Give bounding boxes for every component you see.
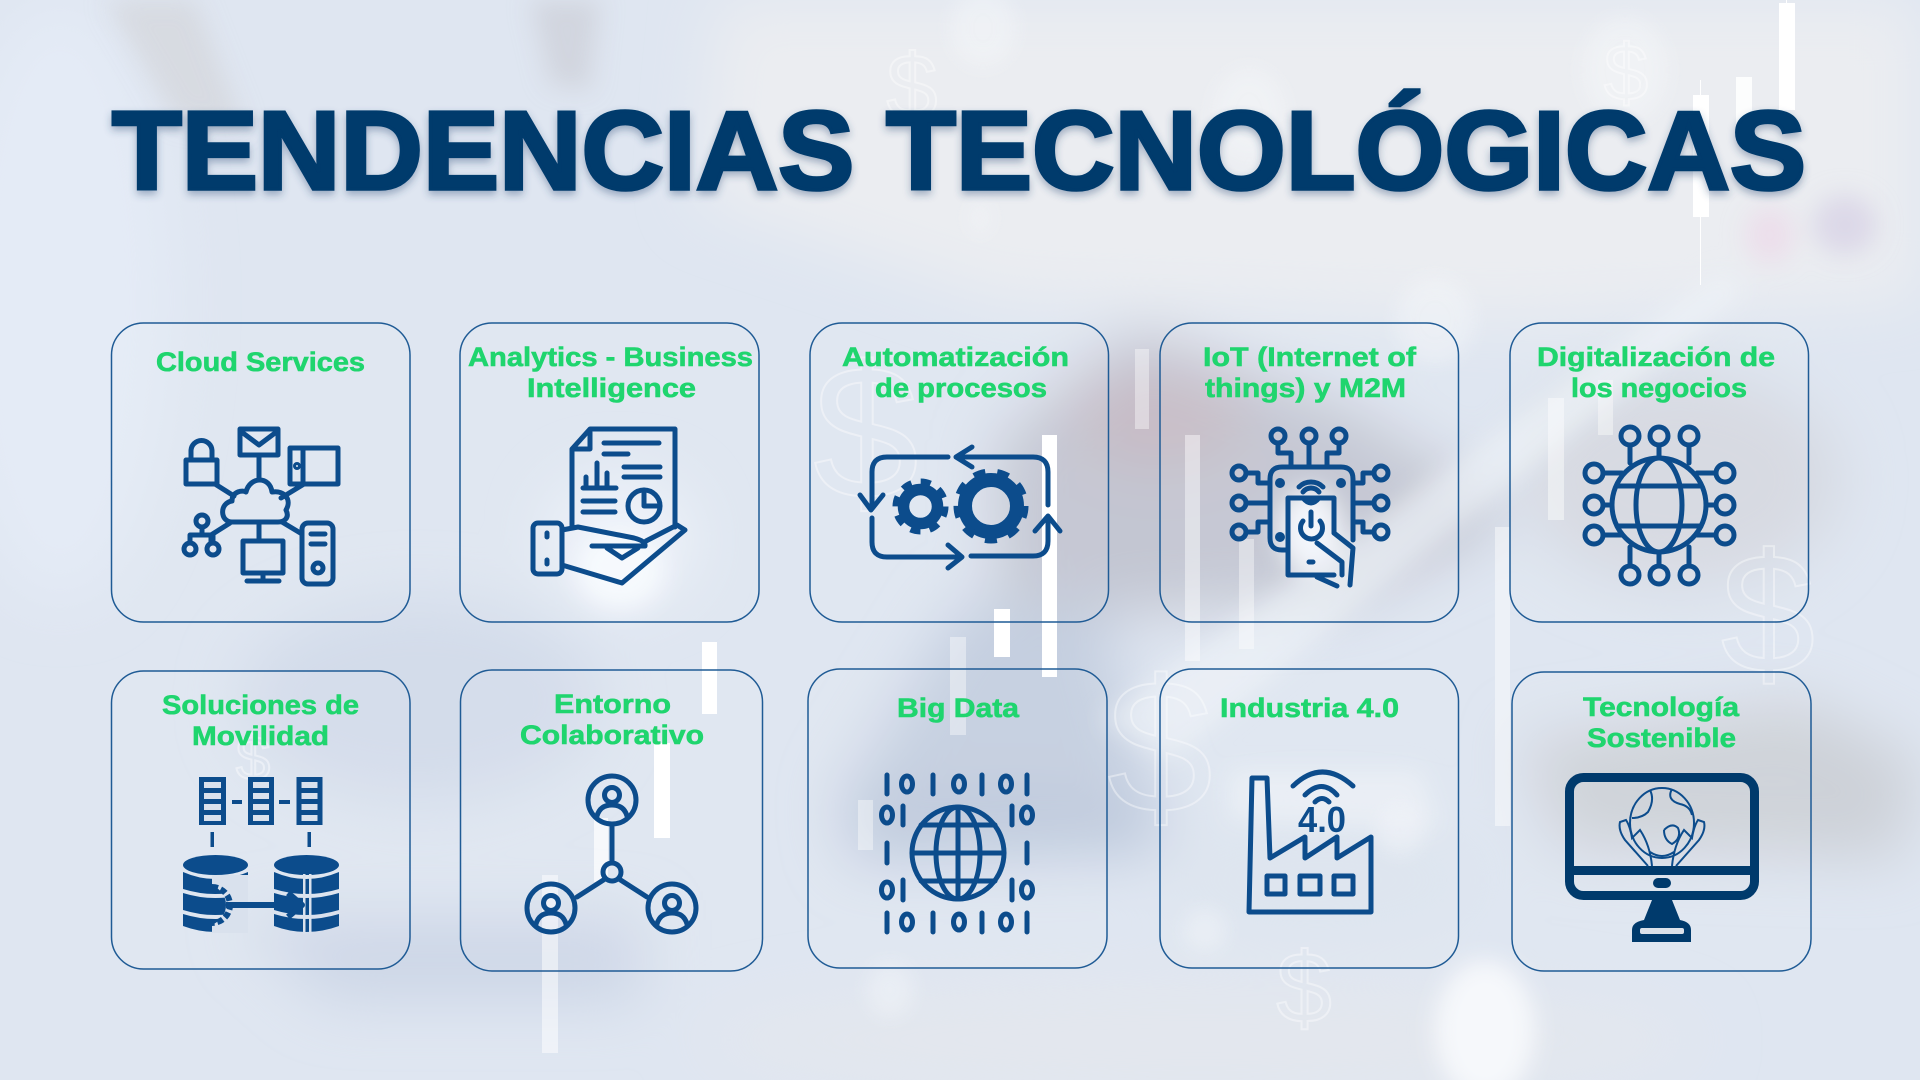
icon: network globe (1585, 427, 1734, 584)
background photo collage: $ (236, 725, 270, 794)
icon: gears and arrows (860, 447, 1060, 568)
panel: Digitalización de los negocios (1510, 323, 1808, 622)
panel: Entorno Colaborativo (460, 670, 762, 971)
heading: Entorno Colaborativo: Entorno (554, 689, 671, 719)
icon: IoT chip and phone (1232, 429, 1388, 586)
heading: Analytics - Business Intelligence: Analytics - Business (468, 342, 753, 372)
heading: Industria 4.0: Industria 4.0 (1220, 693, 1399, 723)
panel: Industria 4.0 (1160, 669, 1458, 968)
panel: Soluciones de Movilidad (112, 671, 410, 969)
panel: Analytics - Business Intelligence (460, 323, 759, 622)
background photo collage: $ (1721, 519, 1815, 709)
heading: Analytics - Business Intelligence (468, 342, 753, 403)
background photo collage: $ (1107, 641, 1213, 853)
heading: Tecnología Sostenible: Sostenible (1587, 723, 1736, 753)
icon: factory 4.0: 4.0 (1298, 799, 1346, 840)
heading: Soluciones de Movilidad: Movilidad (192, 721, 329, 751)
icon: servers and databases (183, 777, 339, 934)
heading: Soluciones de Movilidad: Soluciones de (162, 690, 359, 720)
icon: factory 4.0 (1249, 772, 1371, 912)
heading: Cloud Services: Cloud Services (156, 347, 365, 377)
heading: IoT (Internet of things) y M2M: things) y M2M (1205, 373, 1406, 403)
background photo collage: $ (886, 36, 938, 138)
heading: Tecnología Sostenible: Tecnología (1583, 692, 1740, 722)
heading: Digitalización de los negocios: los negocios (1571, 373, 1747, 403)
heading: IoT (Internet of things) y M2M (1203, 342, 1417, 403)
background photo collage: $ (1604, 28, 1648, 117)
heading: Digitalización de los negocios: Digitalización de (1537, 342, 1775, 372)
icon: report on hand (533, 429, 685, 583)
icon: cloud network (184, 429, 338, 584)
icon: connected people (527, 776, 696, 932)
background photo collage: $ (813, 327, 919, 539)
heading: Entorno Colaborativo: Colaborativo (520, 720, 704, 750)
icon: binary globe (882, 775, 1032, 932)
heading: Analytics - Business Intelligence: Intelligence (527, 373, 696, 403)
background photo collage: $ (1276, 932, 1332, 1044)
heading: Tecnología Sostenible (1583, 692, 1740, 753)
heading: Entorno Colaborativo (520, 689, 704, 750)
title: TENDENCIAS TECNOLÓGICAS (112, 89, 1806, 213)
panel: Cloud Services (112, 323, 410, 622)
heading: Big Data: Big Data (897, 693, 1020, 723)
heading: Automatización de procesos: Automatización (842, 342, 1069, 372)
heading: Digitalización de los negocios (1537, 342, 1775, 403)
heading: Automatización de procesos (842, 342, 1069, 403)
panel: Automatización de procesos (810, 323, 1108, 622)
heading: IoT (Internet of things) y M2M: IoT (Internet of (1203, 342, 1417, 372)
panel: Tecnología Sostenible (1512, 672, 1811, 971)
heading: Soluciones de Movilidad (162, 690, 359, 751)
heading: Automatización de procesos: de procesos (875, 373, 1047, 403)
panel: Big Data (808, 669, 1107, 968)
icon: monitor with globe in hands (1569, 778, 1755, 942)
panel: IoT (Internet of things) y M2M (1160, 323, 1458, 622)
